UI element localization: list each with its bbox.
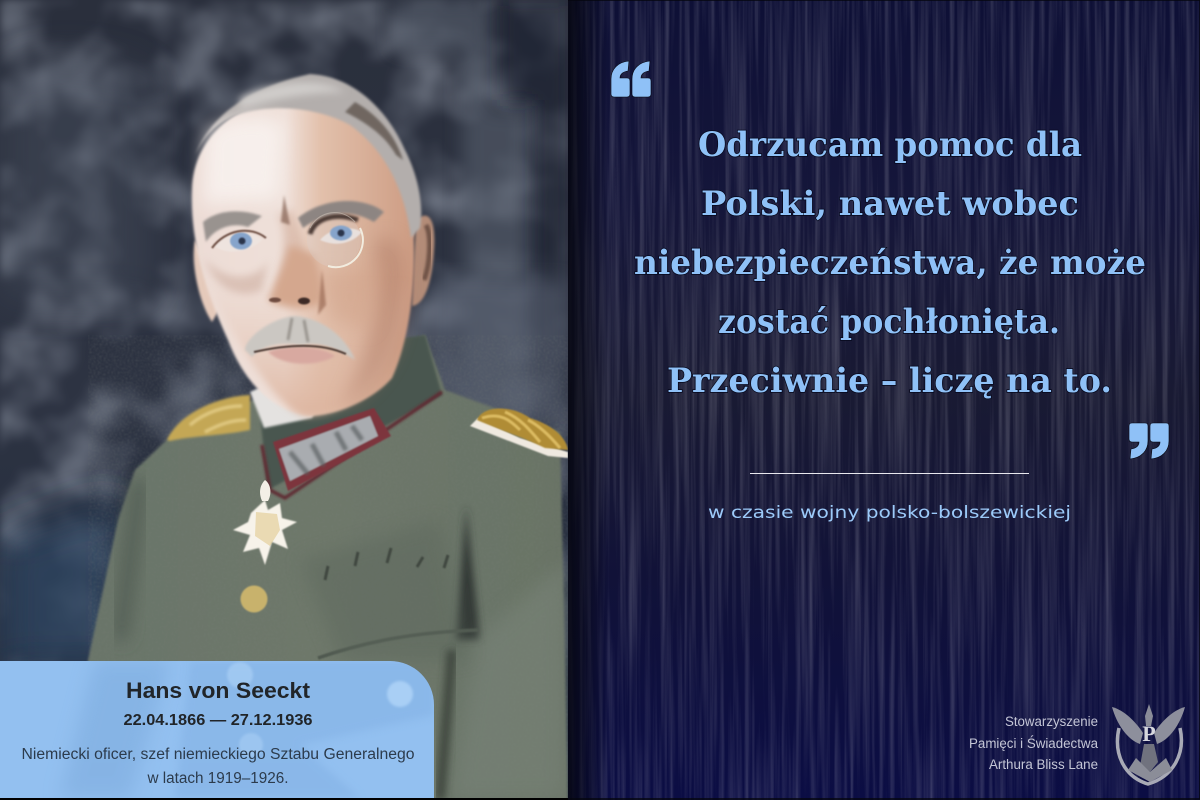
quote text: niebezpieczeństwa, że może (634, 243, 1146, 283)
button (240, 586, 268, 612)
panel: portrait photograph (0, 0, 568, 800)
collar patch (273, 408, 391, 491)
organisation name (969, 714, 1098, 772)
epaulette right (470, 408, 568, 458)
description: w latach 1919–1926. (147, 770, 288, 787)
icon: closing quotation mark (1129, 423, 1169, 459)
hair (195, 74, 421, 238)
shadows (346, 238, 406, 402)
quote text: Polski, nawet wobec (701, 184, 1079, 224)
eyebrows (203, 211, 262, 242)
head (192, 74, 434, 416)
background frame band (395, 0, 530, 430)
epaulette left (167, 395, 250, 441)
icon: opening quotation mark (611, 61, 651, 97)
description (22, 748, 414, 783)
quote text (634, 125, 1146, 401)
nose (268, 245, 323, 309)
nostrils (269, 298, 281, 302)
quote context caption: w czasie wojny polsko-bolszewickiej (708, 503, 1071, 522)
quote text: Odrzucam pomoc dla (698, 125, 1082, 165)
neck and collar (250, 335, 442, 498)
icon: association eagle emblem (1112, 704, 1185, 784)
icon: association eagle emblem: P (1142, 721, 1156, 746)
medal star (233, 480, 297, 565)
name: Hans von Seeckt (126, 678, 311, 703)
panel: quote background (568, 0, 1200, 800)
panel: biography card (0, 661, 434, 798)
description: Niemiecki oficer, szef niemieckiego Sztabu Generalnego (22, 746, 414, 763)
eye left (216, 236, 235, 250)
dates: 22.04.1866 — 27.12.1936 (124, 712, 313, 729)
eye right with monocle (307, 213, 361, 267)
quote text: zostać pochłonięta. (718, 302, 1060, 342)
organisation name: Stowarzyszenie (1005, 714, 1098, 729)
lips (268, 347, 335, 364)
face shape (192, 90, 415, 416)
ear (412, 216, 434, 306)
divider line (750, 473, 1029, 474)
organisation name: Arthura Bliss Lane (989, 757, 1098, 772)
quote text: Przeciwnie – liczę na to. (667, 361, 1112, 401)
jacket (88, 335, 568, 800)
moustache (245, 316, 355, 360)
organisation name: Pamięci i Świadectwa (969, 736, 1098, 751)
pocket stitches (325, 548, 448, 580)
